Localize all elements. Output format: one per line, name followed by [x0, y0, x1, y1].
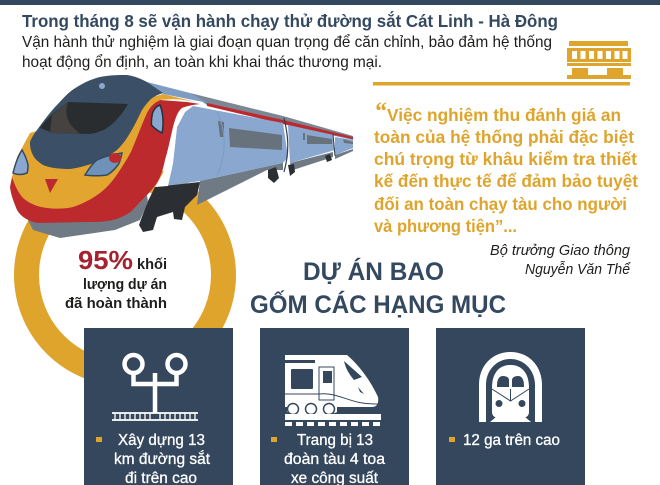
quote: toàn của hệ thống phải đặc biệt	[374, 127, 634, 147]
quote	[374, 98, 638, 236]
headlights	[85, 153, 122, 176]
wheels	[268, 154, 332, 183]
intro text: Vận hành thử nghiệm là giai đoạn quan trọng để căn chỉnh, bảo đảm hệ thống	[22, 33, 552, 51]
quote attribution: Nguyễn Văn Thể	[525, 261, 631, 278]
undercarriage	[139, 182, 200, 232]
icon: signal	[112, 355, 198, 420]
panel text	[114, 432, 211, 485]
roof lamp	[99, 83, 105, 89]
panel text	[284, 432, 385, 485]
side door window	[151, 105, 163, 133]
icon: railway carriage	[567, 41, 631, 79]
red roof stripe	[207, 103, 353, 139]
divider rail line	[373, 82, 630, 86]
underside	[197, 163, 283, 205]
panel text: 12 ga trên cao	[463, 432, 560, 449]
side windows	[229, 128, 353, 150]
quote attribution: Bộ trưởng Giao thông	[490, 242, 631, 259]
panel text: Xây dựng 13	[118, 432, 205, 449]
quote: “	[374, 98, 387, 125]
panel: elevated track	[84, 328, 233, 485]
bullet	[96, 437, 102, 442]
quote: Việc nghiệm thu đánh giá an	[387, 105, 621, 125]
panel: rolling stock	[260, 328, 409, 485]
yellow band	[12, 94, 208, 209]
skirt	[28, 195, 148, 238]
carriage bodies	[168, 106, 288, 186]
windscreen	[40, 102, 128, 134]
red nose	[10, 100, 200, 223]
panel text: Trang bị 13	[297, 432, 373, 449]
section heading: DỰ ÁN BAO	[303, 257, 444, 286]
section heading: GỐM CÁC HẠNG MỤC	[250, 289, 506, 319]
percent callout: 95%	[78, 245, 133, 275]
percent callout: khối	[137, 256, 167, 273]
quote: kế đến thực tế để đảm bảo tuyệt	[374, 171, 638, 191]
panel: stations	[436, 328, 585, 485]
carriage gaps	[284, 118, 288, 172]
nose badge	[45, 179, 58, 193]
white swoosh	[155, 106, 193, 187]
roof light panel	[147, 82, 208, 103]
intro text: hoạt động ổn định, an toàn khi khai thác thương mại.	[22, 53, 382, 71]
percent callout: đã hoàn thành	[65, 295, 167, 312]
top bar	[0, 0, 660, 5]
progress ring	[26, 176, 224, 374]
panel text: đoàn tàu 4 toa	[284, 451, 385, 468]
percent callout: lượng dự án	[83, 276, 167, 293]
quote attribution	[490, 242, 631, 278]
panel text: km đường sắt	[114, 451, 211, 468]
intro text	[22, 33, 552, 71]
grey roof	[190, 93, 353, 140]
door lines	[217, 112, 224, 175]
dark cab	[30, 75, 163, 169]
train illustration	[10, 75, 353, 238]
quote: và phương tiện”...	[374, 216, 517, 236]
section heading	[250, 257, 506, 319]
icon: train on rails	[285, 355, 381, 426]
bullet	[271, 437, 277, 442]
quote: đối an toàn chạy tàu cho người	[374, 194, 627, 214]
quote: chú trọng từ khâu kiểm tra thiết	[374, 149, 637, 169]
bullet	[449, 437, 455, 442]
percent callout	[65, 245, 167, 312]
icon: train in tunnel	[479, 352, 542, 422]
title: Trong tháng 8 sẽ vận hành chạy thử đường sắt Cát Linh - Hà Đông	[22, 10, 558, 31]
